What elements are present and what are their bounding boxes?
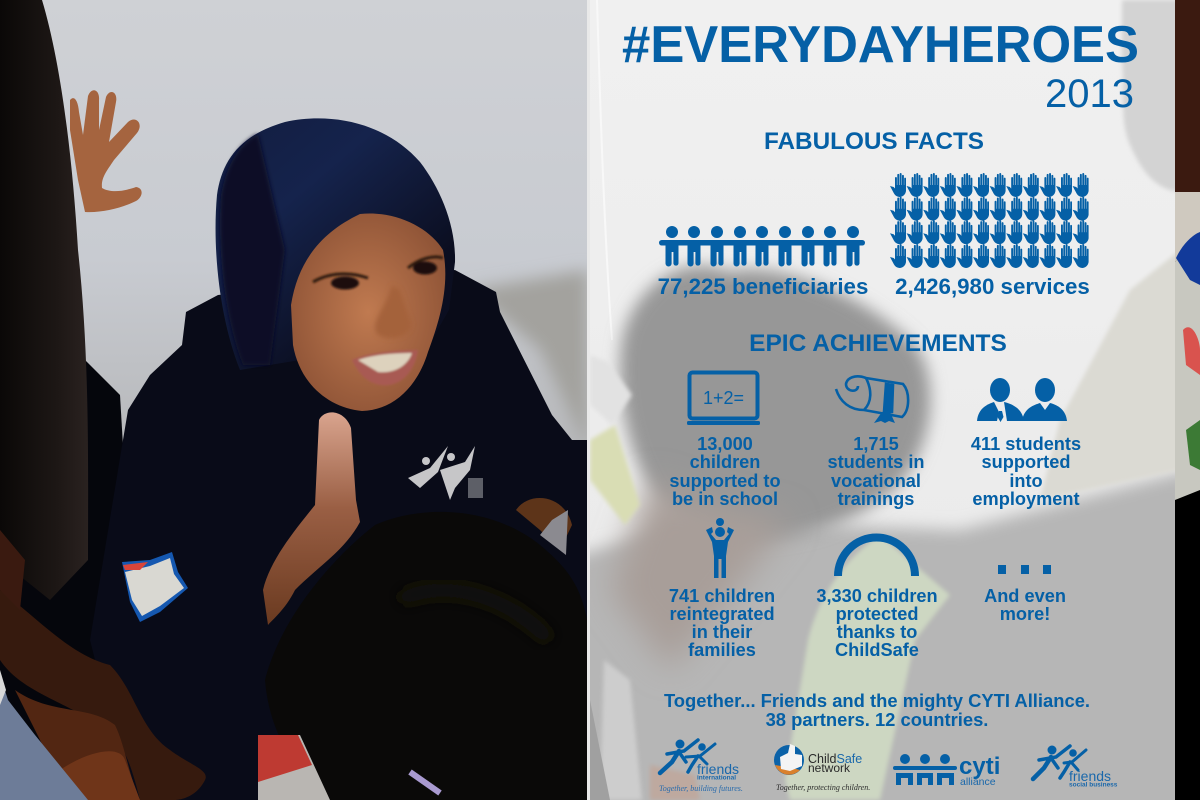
logo: friends international: Together, building futures. xyxy=(659,784,743,793)
stat: childsafe: thanks to xyxy=(837,622,917,642)
logo: friends social business: social business xyxy=(1069,782,1118,788)
white plug xyxy=(592,358,634,420)
logo: childsafe network xyxy=(774,744,870,792)
stat: school xyxy=(669,434,781,509)
icon: child on shoulders xyxy=(706,518,734,578)
stat: employment xyxy=(971,434,1081,509)
alliance statement: Together... Friends and the mighty CYTI Alliance. xyxy=(664,690,1090,711)
stat: employment: supported xyxy=(982,452,1070,472)
logo: friends international: friends xyxy=(697,761,739,777)
hair tie xyxy=(410,772,440,793)
year: 2013 xyxy=(1045,72,1134,116)
icon: three squares xyxy=(998,565,1051,574)
icon: row of people xyxy=(659,226,865,267)
wall shadow at floor xyxy=(479,264,587,438)
logo: childsafe network: Together, protecting children. xyxy=(776,783,870,792)
green shirt xyxy=(785,535,950,800)
yellow fabric xyxy=(590,425,640,525)
shirt logo xyxy=(408,446,483,500)
stat: employment: into xyxy=(1009,471,1043,491)
icon: grid of hands xyxy=(890,173,1089,268)
wall xyxy=(40,0,590,470)
lower grey body xyxy=(560,470,1190,800)
lace fabric xyxy=(600,660,642,800)
stat: families: 741 children xyxy=(669,586,775,606)
stat: vocational: 1,715 xyxy=(853,434,899,454)
title: #EVERYDAYHEROES xyxy=(622,16,1139,74)
stat: families xyxy=(669,586,775,660)
logo: childsafe network: network xyxy=(808,761,851,775)
pale shirt at right xyxy=(1040,250,1180,500)
second hand xyxy=(516,498,572,536)
stat: vocational: trainings xyxy=(838,489,914,509)
alliance statement xyxy=(664,690,1090,730)
profile of child in back xyxy=(1122,0,1180,192)
girl sweater xyxy=(90,270,590,800)
icon: two business people xyxy=(977,378,1067,422)
stat: families: in their xyxy=(692,622,752,642)
stat: school: be in school xyxy=(672,489,778,509)
hand on wall xyxy=(70,90,142,212)
logo: childsafe network: ChildSafe xyxy=(808,752,862,766)
denim sleeve xyxy=(0,692,88,800)
head xyxy=(620,266,930,540)
stat: and even more xyxy=(984,586,1066,624)
heading: epic achievements: EPIC ACHIEVEMENTS xyxy=(749,330,1007,357)
alliance statement: 38 partners. 12 countries. xyxy=(766,709,988,730)
hair of person at left xyxy=(10,0,88,600)
stat: families: reintegrated xyxy=(669,604,775,624)
skin area xyxy=(610,480,790,670)
foreground child's hair xyxy=(265,512,590,800)
stat: school: children xyxy=(690,452,760,472)
stat: and even more: And even xyxy=(984,586,1066,606)
stat: vocational xyxy=(827,434,925,509)
logo: friends social business xyxy=(1033,746,1118,788)
face xyxy=(291,213,445,411)
logo: cyti alliance: alliance xyxy=(960,776,996,788)
hijab xyxy=(216,118,455,370)
stat: vocational: vocational xyxy=(831,471,921,491)
icon: laptop blackboard xyxy=(687,372,760,425)
mouth xyxy=(352,350,418,385)
raised thumb xyxy=(263,412,360,625)
logo: friends international: international xyxy=(697,774,736,782)
sleeve thumb patch xyxy=(122,552,188,622)
stat: beneficiaries: 77,225 beneficiaries xyxy=(658,274,868,299)
logo: friends international xyxy=(659,740,743,793)
stat: services: 2,426,980 services xyxy=(895,274,1090,299)
thigh of left person xyxy=(15,690,140,800)
icon: protective arch xyxy=(838,538,915,576)
dark shape beside hair xyxy=(86,360,123,470)
stat: childsafe: ChildSafe xyxy=(835,640,919,660)
stat: employment: employment xyxy=(972,489,1080,509)
translucent panel over second photo xyxy=(560,0,1190,800)
icon: laptop blackboard: 1+2= xyxy=(703,388,744,408)
stat: school: supported to xyxy=(669,471,781,491)
heading: fabulous facts: FABULOUS FACTS xyxy=(764,128,984,155)
red card xyxy=(258,735,330,800)
stat: childsafe: 3,330 children xyxy=(816,586,938,606)
icon: diploma scroll xyxy=(836,376,908,423)
logo: cyti alliance: cyti xyxy=(959,753,1000,780)
logo: friends social business: friends xyxy=(1069,768,1111,784)
logo: cyti alliance xyxy=(893,753,1000,788)
stat: vocational: students in xyxy=(827,452,925,472)
stat: and even more: more! xyxy=(1000,604,1050,624)
stat: childsafe: protected xyxy=(836,604,918,624)
eyebrows and eyes xyxy=(313,257,443,338)
stat: childsafe xyxy=(816,586,938,660)
right edge photo strip xyxy=(1175,0,1200,800)
stat: employment: 411 students xyxy=(971,434,1081,454)
cable xyxy=(597,0,612,340)
arm of left person xyxy=(0,590,206,800)
stat: families: families xyxy=(688,640,756,660)
stat: school: 13,000 xyxy=(697,434,753,454)
photo: girl speaking against wall xyxy=(0,0,590,800)
